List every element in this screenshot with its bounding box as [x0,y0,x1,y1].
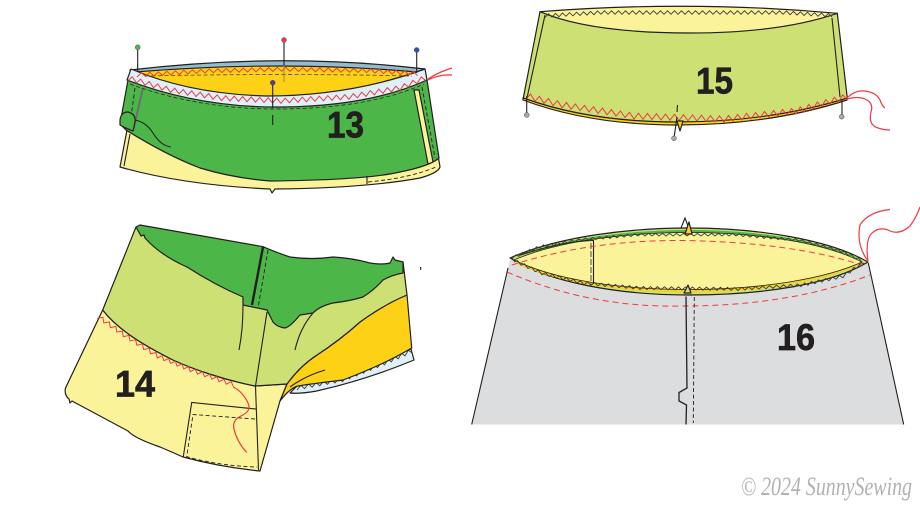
center seam dashes [693,297,694,423]
red zigzag stitch [97,317,234,387]
red loose threads [859,207,920,261]
back dashed line [145,74,412,76]
left grey pin [524,96,529,117]
step number 15: 15 [696,60,733,102]
red pin [282,38,286,82]
step number 14: 14 [115,364,155,404]
yellow shorts base [120,130,440,193]
gold lining [280,295,412,401]
front notch [684,285,691,293]
left side seam [527,15,545,98]
bottom dark zigzag stitch [514,261,864,290]
pocket outline [183,402,256,457]
dark green inside [136,225,403,328]
step number 16: 16 [777,317,815,358]
pocket dashes [590,243,592,285]
center back seam [252,247,263,305]
light green waistband [103,227,407,386]
side seam [256,312,267,470]
left seam dashes [131,88,135,117]
top dark zigzag stitch [512,233,862,262]
inner gold lining [135,66,417,98]
gold crease [290,370,325,387]
inner top notch [685,222,692,234]
inner red dashed stitch [512,240,862,265]
light green band [523,12,847,122]
gold hem edge [523,98,847,125]
step 14 illustration: shorts folded open [65,225,421,471]
left side seam [133,88,143,131]
center front seam [679,296,687,424]
right grey pin [839,100,844,119]
center notch [677,121,683,131]
red zigzag hem stitch [526,94,847,122]
step number 13: 13 [327,104,364,146]
right side seam [832,18,840,97]
dark zigzag stitch [297,350,412,390]
top back notch [681,218,688,228]
step 16 illustration: finished waist on grey shorts [472,207,920,424]
red loose thread [427,68,452,80]
gold lower band [516,262,860,291]
red loose threads [847,91,890,130]
fold crease left [239,305,243,350]
red loose thread [233,387,249,452]
step 15 illustration: waistband turned down [523,6,890,141]
pocket stitching [368,167,436,182]
step 13 illustration: waistband pinned on shorts [120,38,452,193]
small tick mark [420,267,422,270]
dark zigzag top stitch [545,11,832,18]
green fabric layer [120,80,439,181]
green top band [514,230,862,260]
white elastic band front [127,69,427,107]
back zigzag stitch [137,67,418,77]
right side seam strip [414,90,433,164]
left side edge [472,268,508,424]
pocket inside outline [520,240,594,284]
pocket edge [366,176,368,184]
grey shorts body [472,260,904,424]
yellow lower fabric [65,310,287,471]
green pin [135,45,140,72]
blue pin [414,48,419,73]
fold crease line [135,120,171,147]
fold crease right [295,313,313,350]
yellow inner rim [540,6,837,33]
back rim blue [130,61,425,73]
yellow inner waistband [514,232,862,290]
outer red dashed stitch [507,272,870,306]
center grey pin [672,105,678,141]
pocket stitching [187,414,257,467]
left yellow seam line [124,134,130,166]
light blue underlayer strip [290,349,414,393]
opening band olive [510,228,868,295]
center seam dashes [258,250,268,308]
front zigzag stitch [128,77,426,103]
right seam dashes [422,87,435,158]
front band dashes [130,84,424,109]
folded fabric lump [120,112,135,131]
purple pin [270,80,275,125]
right side edge [868,263,904,424]
